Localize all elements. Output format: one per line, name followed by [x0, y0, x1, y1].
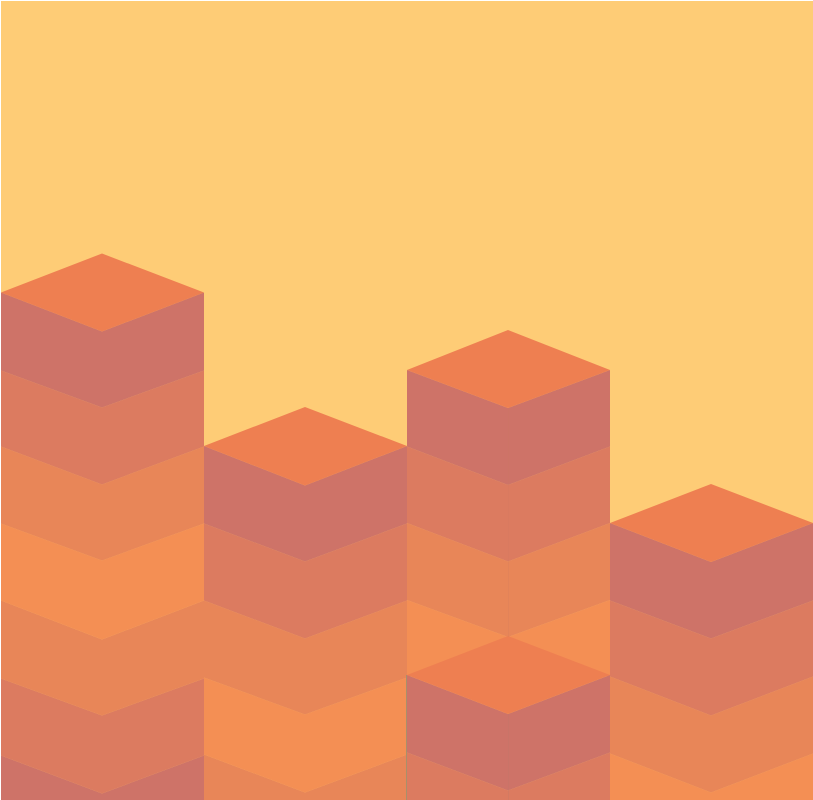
column 4 stack [610, 484, 813, 800]
column 3 stack [406, 330, 610, 800]
column 1 stack [1, 254, 204, 800]
column 2 stack [204, 407, 407, 800]
